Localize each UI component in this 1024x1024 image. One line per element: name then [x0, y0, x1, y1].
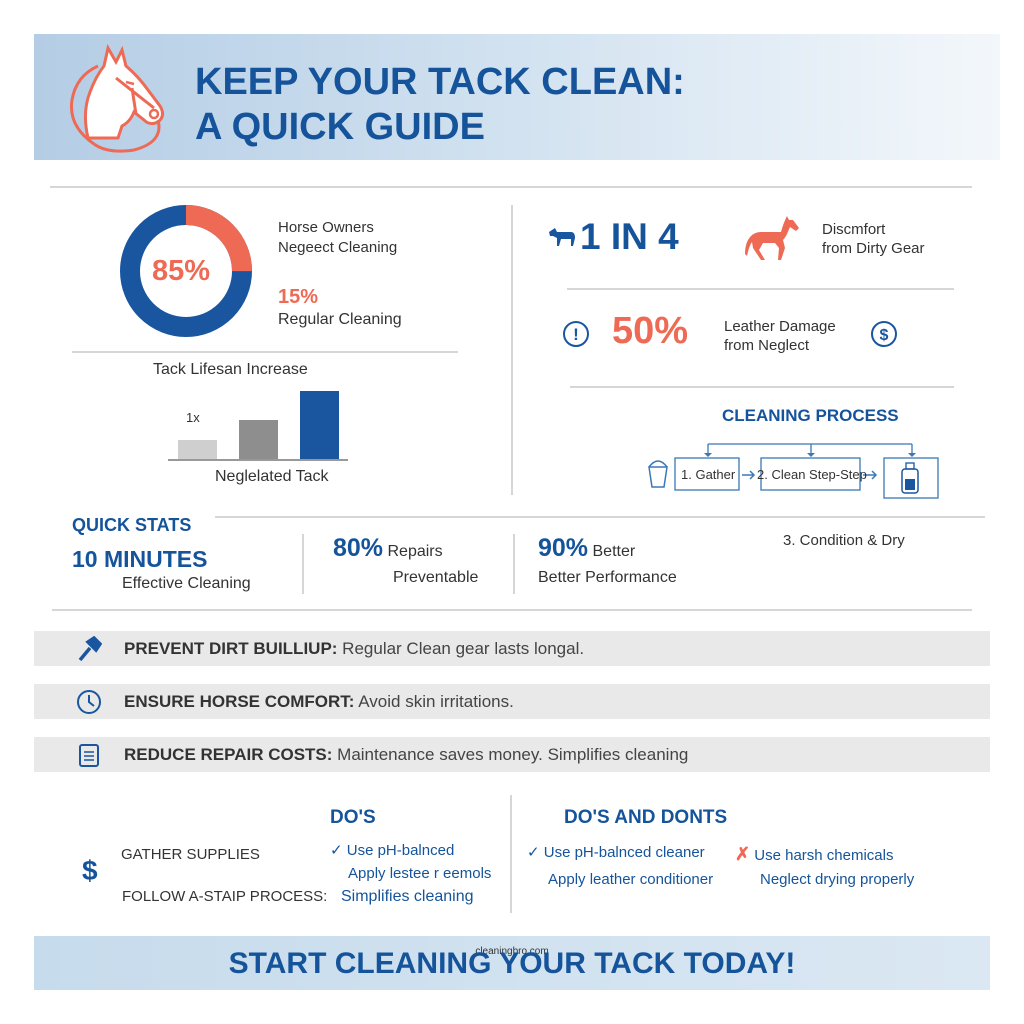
do's left section: FOLLOW A-STAIP PROCESS:	[122, 888, 327, 905]
bar chart: tack lifespan: Neglelated Tack	[215, 468, 329, 485]
stat: 50%: !	[573, 325, 579, 344]
banner: horse comfort: ENSURE HORSE COMFORT: Avoid skin irritations.	[124, 692, 514, 711]
donut chart	[120, 205, 252, 337]
do's and don'ts: Apply leather conditioner	[548, 871, 713, 888]
header banner	[34, 34, 1000, 160]
stat: 50%: from Neglect	[724, 337, 809, 354]
do's left section: Simplifies cleaning	[341, 888, 474, 905]
do's left section: Apply lestee r eemols	[348, 865, 491, 882]
quick stats: 10 MINUTES	[72, 546, 207, 572]
quick stats: Better Performance	[538, 569, 677, 586]
banner: repair costs	[34, 737, 990, 772]
title	[195, 61, 685, 148]
stat: 50%: $	[880, 327, 889, 344]
stat: 1 in 4	[549, 216, 925, 260]
title: KEEP YOUR TACK CLEAN:	[195, 61, 685, 103]
banner: repair costs: REDUCE REPAIR COSTS: Maintenance saves money. Simplifies cleaning	[124, 745, 688, 764]
bar chart: tack lifespan	[153, 361, 348, 485]
do's left section	[82, 807, 491, 905]
bar chart: tack lifespan: Tack Lifesan Increase	[153, 361, 308, 378]
donut legend: Horse Owners	[278, 219, 374, 236]
footer call to action: cleaningbro.com	[475, 946, 549, 957]
cleaning process: CLEANING PROCESS	[722, 406, 899, 425]
quick stats: 90% Better	[538, 534, 635, 562]
do's and don'ts: Neglect drying properly	[760, 871, 914, 888]
do's left section: DO'S	[330, 807, 376, 828]
quick stats	[72, 515, 985, 594]
donut chart: 85%	[152, 255, 210, 287]
banner: prevent dirt: PREVENT DIRT BUILLIUP: Regular Clean gear lasts longal.	[124, 639, 584, 658]
do's and don'ts: ✗ Use harsh chemicals	[735, 844, 893, 864]
quick stats: 80% Repairs	[333, 534, 443, 562]
cleaning process: 2. Clean Step-Step	[757, 467, 867, 482]
do's left section: ✓ Use pH-balnced	[330, 842, 454, 859]
stat: 1 in 4: 1 IN 4	[580, 216, 679, 257]
text: Regular Cleaning	[278, 311, 402, 328]
quick stats: 3. Condition & Dry	[783, 532, 905, 549]
title: A QUICK GUIDE	[195, 106, 485, 148]
stat: 50%	[563, 310, 897, 354]
icon: horse head	[70, 44, 164, 153]
footer call to action	[34, 936, 990, 990]
stat: 1 in 4: from Dirty Gear	[822, 240, 925, 257]
do's and don'ts: DO'S AND DONTS	[564, 807, 727, 828]
do's left section: $	[82, 855, 98, 886]
quick stats: QUICK STATS	[72, 515, 191, 535]
do's and don'ts	[527, 807, 914, 888]
donut legend	[278, 219, 397, 256]
stat: 50%: Leather Damage	[724, 318, 836, 335]
banner: horse comfort	[34, 684, 990, 719]
do's and don'ts: ✓ Use pH-balnced cleaner	[527, 844, 705, 861]
bar chart: tack lifespan: 1x	[186, 410, 200, 425]
cleaning process: 1. Gather	[681, 467, 735, 482]
quick stats: Effective Cleaning	[122, 575, 251, 592]
donut legend: Negeect Cleaning	[278, 239, 397, 256]
stat: 1 in 4: Discmfort	[822, 221, 885, 238]
cleaning process	[648, 406, 939, 499]
text: 15%	[278, 286, 318, 308]
do's left section: GATHER SUPPLIES	[121, 846, 260, 863]
quick stats: Preventable	[393, 569, 478, 586]
banner: prevent dirt	[34, 631, 990, 666]
footer call to action: START CLEANING YOUR TACK TODAY!	[229, 947, 795, 980]
stat: 50%: 50%	[612, 310, 688, 352]
